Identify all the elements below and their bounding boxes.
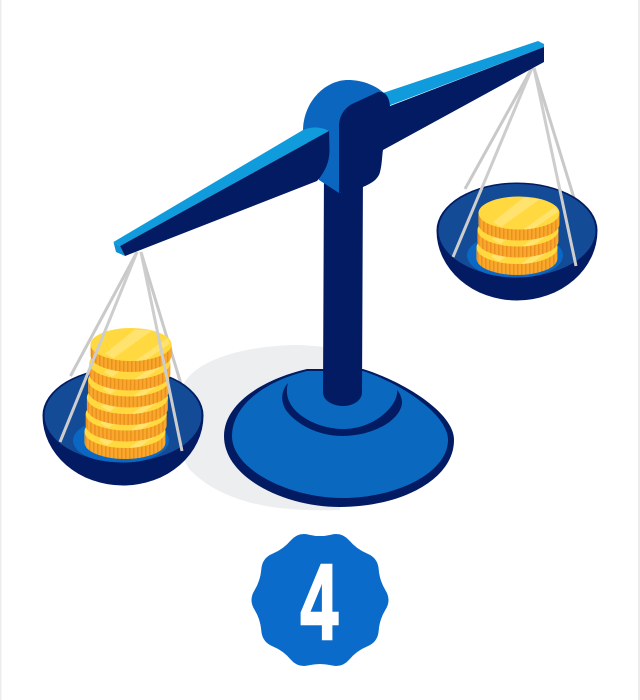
floor shadow — [178, 345, 340, 510]
base — [224, 369, 454, 507]
base top — [232, 371, 448, 498]
hub front and right beam — [339, 47, 544, 193]
badge shape — [251, 534, 389, 666]
left beam top face — [114, 127, 329, 246]
number badge — [251, 534, 389, 666]
left coin stack — [84, 328, 172, 459]
back ropes of left pan — [70, 252, 181, 384]
right bowl — [436, 182, 598, 300]
base outline — [224, 369, 454, 507]
base ring — [282, 383, 402, 436]
column — [323, 170, 363, 406]
left bowl — [42, 368, 204, 486]
front ropes of right pan — [453, 68, 576, 266]
left beam front face — [120, 131, 330, 256]
back ropes of right pan — [465, 68, 574, 198]
right coin stack — [476, 196, 560, 275]
front ropes of left pan — [60, 252, 182, 451]
left beam — [114, 127, 330, 256]
hub back — [303, 80, 388, 193]
right pan — [436, 68, 598, 300]
badge number: 4 — [300, 542, 338, 663]
right beam top face — [380, 41, 544, 106]
left pan — [42, 252, 204, 486]
left beam end — [114, 242, 125, 256]
